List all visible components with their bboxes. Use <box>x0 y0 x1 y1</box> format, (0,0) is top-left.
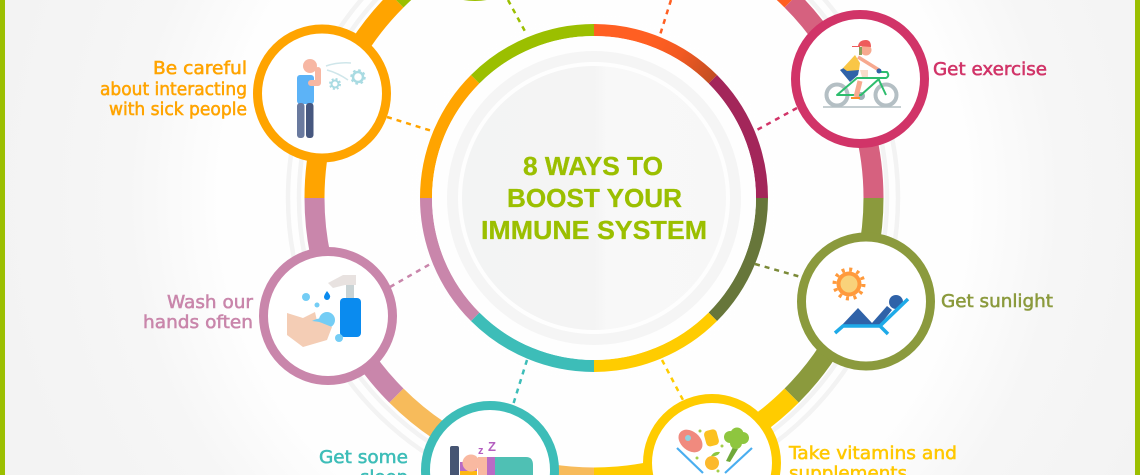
inner coloured ring <box>426 30 762 366</box>
icon: cyclist <box>823 40 901 107</box>
left border <box>0 0 5 475</box>
right border <box>1135 0 1140 475</box>
icon: sleeping person: Z <box>488 439 496 454</box>
panel: vitamins and supplements <box>648 398 957 475</box>
icon: healthy food <box>674 425 752 473</box>
label: get exercise: Get exercise <box>933 59 1047 80</box>
pale guide rings <box>288 0 898 475</box>
label: wash our hands: hands often <box>143 312 253 333</box>
label: be careful: about interacting <box>100 79 247 100</box>
title <box>481 151 707 245</box>
label: be careful <box>100 58 247 120</box>
title: 8 WAYS TO <box>523 151 663 181</box>
label: get sunlight: Get sunlight <box>941 291 1053 312</box>
label: be careful: Be careful <box>153 58 247 79</box>
panel: get some sleep <box>319 406 554 475</box>
panel: wash our hands <box>143 252 392 380</box>
title: IMMUNE SYSTEM <box>481 215 707 245</box>
dashed connectors <box>387 0 801 405</box>
icon: sun and lounger <box>834 270 908 334</box>
label: wash our hands: Wash our <box>167 292 254 313</box>
label: wash our hands <box>143 292 254 333</box>
panel: get sunlight <box>802 237 1053 366</box>
title: BOOST YOUR <box>507 183 682 213</box>
icon: hand washing <box>287 275 361 347</box>
label: take vitamins: Take vitamins and <box>788 443 957 464</box>
label: take vitamins <box>788 443 957 475</box>
outer coloured ring <box>314 0 874 475</box>
icon: sleeping person <box>450 439 533 475</box>
icon: sleeping person: z <box>478 445 484 457</box>
panel: get exercise <box>796 14 1047 144</box>
panel: be careful about sick people <box>100 29 386 158</box>
centre disc <box>432 36 756 360</box>
label: be careful: with sick people <box>109 99 247 120</box>
label: get some sleep: Get some <box>319 447 408 468</box>
icon: sneezing person <box>297 59 364 138</box>
